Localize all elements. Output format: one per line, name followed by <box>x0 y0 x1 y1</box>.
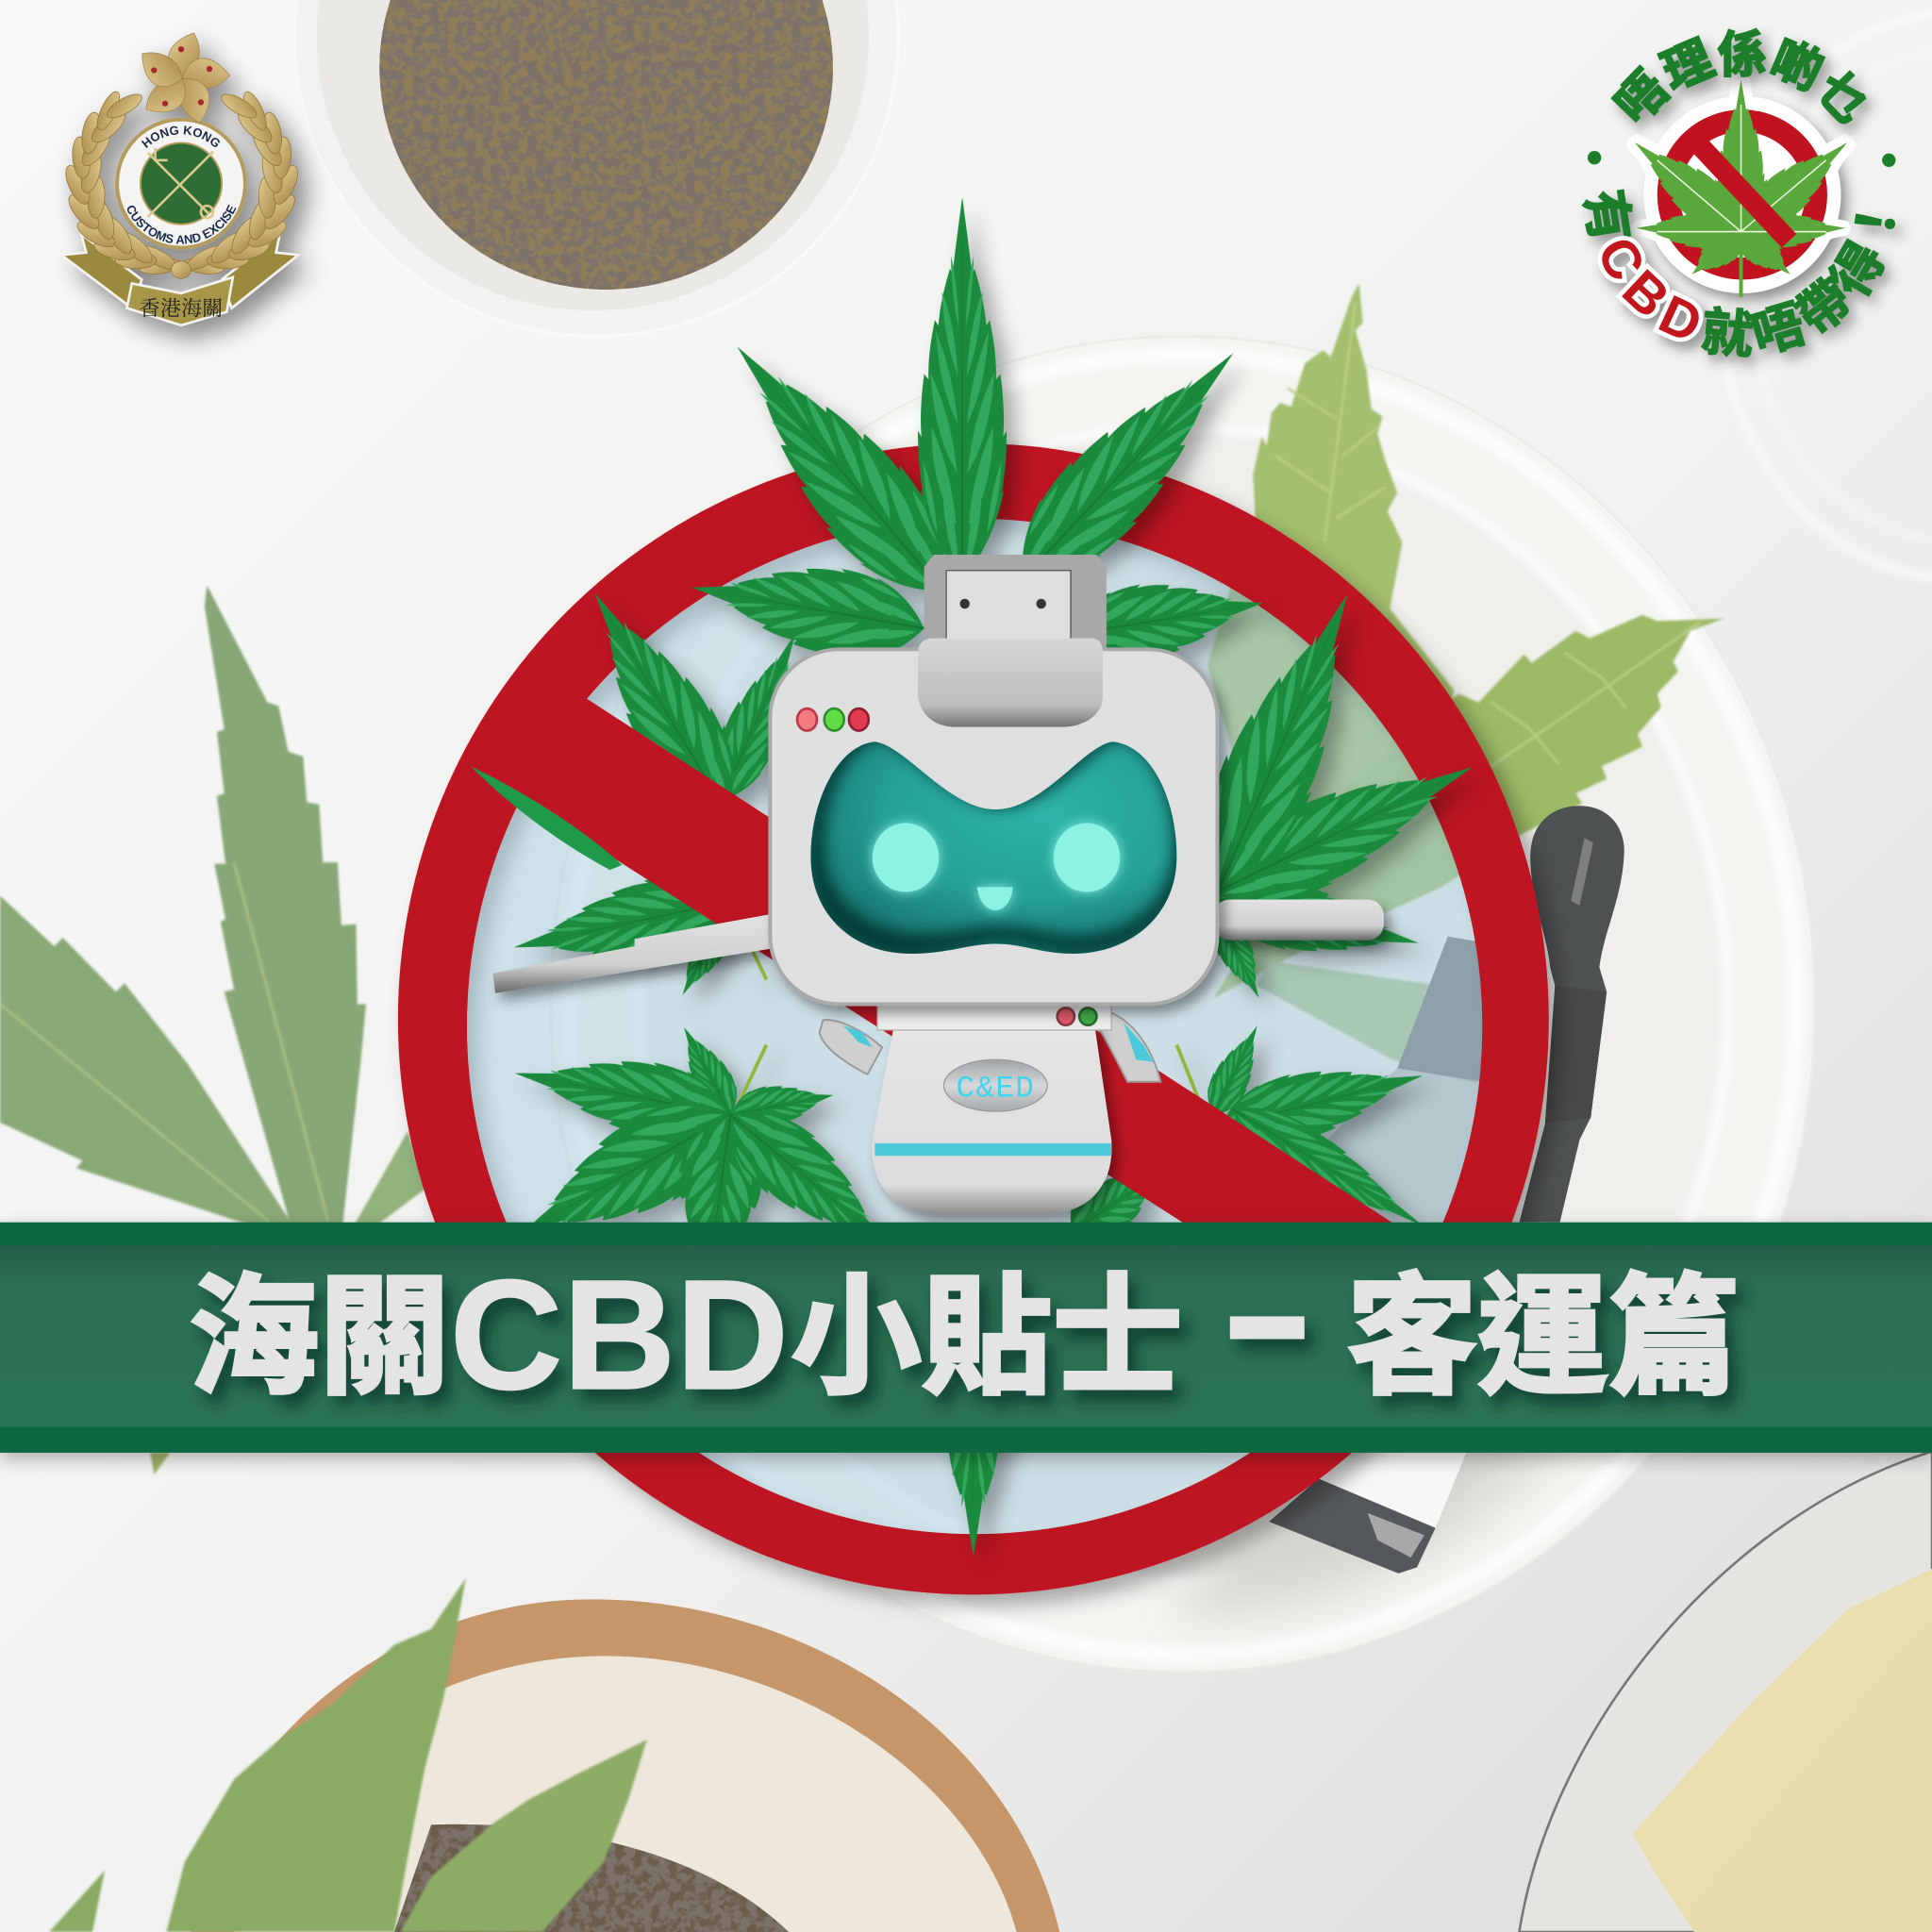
wooden bowl <box>191 1599 1059 1932</box>
bottom centre leaf <box>927 1232 1020 1557</box>
slogan top: 唔理係啲乜 <box>1610 28 1877 138</box>
title banner <box>0 1223 1932 1453</box>
red slash <box>1690 137 1796 248</box>
large white plate <box>551 337 1815 1672</box>
visor face <box>810 732 1182 954</box>
photo leaves left <box>0 585 425 1474</box>
sticker base <box>1620 80 1862 293</box>
bauhinia <box>133 31 231 126</box>
photo leaf top right <box>1208 283 1724 1084</box>
leaves bottom right <box>1055 1018 1438 1257</box>
small left arm <box>820 1020 882 1074</box>
head flap <box>918 639 1103 727</box>
leaf sliver along bar edge <box>471 766 623 870</box>
crossed keys <box>148 148 213 218</box>
prohibition ring <box>398 443 1549 1594</box>
dots <box>1588 151 1895 167</box>
seal <box>108 113 264 278</box>
bottom right plate with cheese <box>1519 1452 1932 1932</box>
chest badge C&ED: C&ED <box>957 1071 1035 1106</box>
customs emblem <box>60 32 323 353</box>
chest badge C&ED <box>943 1059 1047 1111</box>
eyes <box>873 823 1120 910</box>
title text: 小貼士 <box>791 1265 1183 1410</box>
left long arm <box>492 914 770 993</box>
title text: 客運篇 <box>1347 1265 1739 1410</box>
stems <box>733 949 1205 1115</box>
small right arm <box>1099 1013 1160 1082</box>
top fan leaves <box>684 197 1270 673</box>
laurel wreath <box>61 89 182 276</box>
cannabis leaf cluster <box>498 197 1491 1557</box>
translucent blue inner disc <box>467 519 1482 1534</box>
red ring <box>1668 121 1816 269</box>
seal: CUSTOMS AND EXCISE <box>126 204 236 244</box>
title text: CBD <box>450 1248 789 1423</box>
head indicator lights <box>797 708 869 731</box>
leaves bottom left <box>498 1018 911 1287</box>
right long arm <box>1214 899 1384 941</box>
torso stripe <box>874 1143 1111 1156</box>
torso <box>872 1023 1111 1214</box>
leaf <box>1620 80 1862 297</box>
top bowl with powder <box>294 0 898 337</box>
red prohibition bar <box>475 661 1464 1269</box>
campaign badge <box>1581 28 1907 372</box>
robot mascot <box>492 555 1384 1214</box>
wreath knot <box>172 261 191 278</box>
title text: 海關 <box>189 1265 450 1410</box>
ribbon: 香港海關 <box>140 291 223 322</box>
title text: – <box>1231 1246 1304 1391</box>
photo leaves bottom <box>49 1578 647 1932</box>
ribbon <box>61 234 298 325</box>
slogan bottom: 有CBD就唔帶得！ <box>1581 189 1907 372</box>
head <box>770 649 1217 1004</box>
dropper bottle <box>1195 806 1624 1574</box>
leaves right <box>1177 575 1491 1006</box>
collar with lights <box>877 1002 1111 1030</box>
leaves upper left <box>506 573 821 1004</box>
glass dish top right <box>1719 12 1932 579</box>
seal text: HONG KONG <box>142 125 220 148</box>
head tag <box>924 555 1107 657</box>
